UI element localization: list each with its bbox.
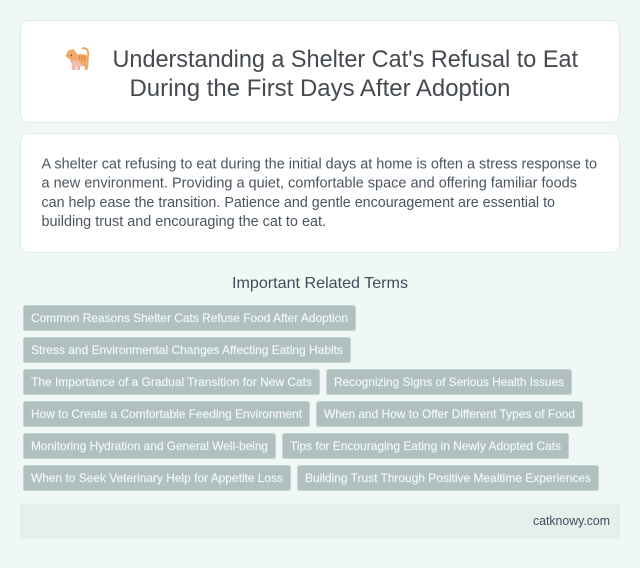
tag: The Importance of a Gradual Transition for New Cats	[31, 375, 312, 389]
tag: Stress and Environmental Changes Affecting Eating Habits	[31, 343, 343, 357]
tag	[24, 370, 320, 394]
description text: can help ease the transition. Patience and gentle encouragement are essential to	[42, 195, 555, 211]
tag list	[24, 306, 598, 490]
description text: building trust and encouraging the cat to eat.	[42, 214, 326, 230]
panel: title card	[20, 20, 620, 122]
tag	[24, 306, 356, 330]
description text	[42, 156, 597, 230]
panel: description	[20, 134, 620, 252]
tag: Common Reasons Shelter Cats Refuse Food After Adoption	[31, 311, 348, 325]
description text: A shelter cat refusing to eat during the initial days at home is often a stress response to	[42, 156, 597, 172]
tag: When and How to Offer Different Types of Food	[324, 407, 575, 421]
tag	[24, 434, 276, 458]
footer	[20, 504, 620, 538]
tag	[24, 466, 290, 490]
footer site name: catknowy.com	[533, 513, 610, 528]
icon: cat	[65, 48, 89, 70]
tag	[298, 466, 598, 490]
tag	[282, 434, 568, 458]
tag	[326, 370, 572, 394]
tag: Building Trust Through Positive Mealtime Experiences	[305, 471, 591, 485]
title text: During the First Days After Adoption	[130, 75, 510, 102]
heading: important related terms: Important Related Terms	[232, 275, 408, 292]
tag	[24, 402, 310, 426]
tag: Monitoring Hydration and General Well-being	[31, 439, 268, 453]
tag: Recognizing Signs of Serious Health Issues	[334, 375, 564, 389]
tag	[316, 402, 582, 426]
tag: How to Create a Comfortable Feeding Environment	[31, 407, 303, 421]
tag: Tips for Encouraging Eating in Newly Adopted Cats	[290, 439, 561, 453]
tag: When to Seek Veterinary Help for Appetite Loss	[31, 471, 283, 485]
title text: Understanding a Shelter Cat's Refusal to Eat	[112, 46, 578, 73]
tag	[24, 338, 350, 362]
description text: a new environment. Providing a quiet, comfortable space and offering familiar foods	[42, 176, 577, 192]
title text	[112, 46, 578, 102]
